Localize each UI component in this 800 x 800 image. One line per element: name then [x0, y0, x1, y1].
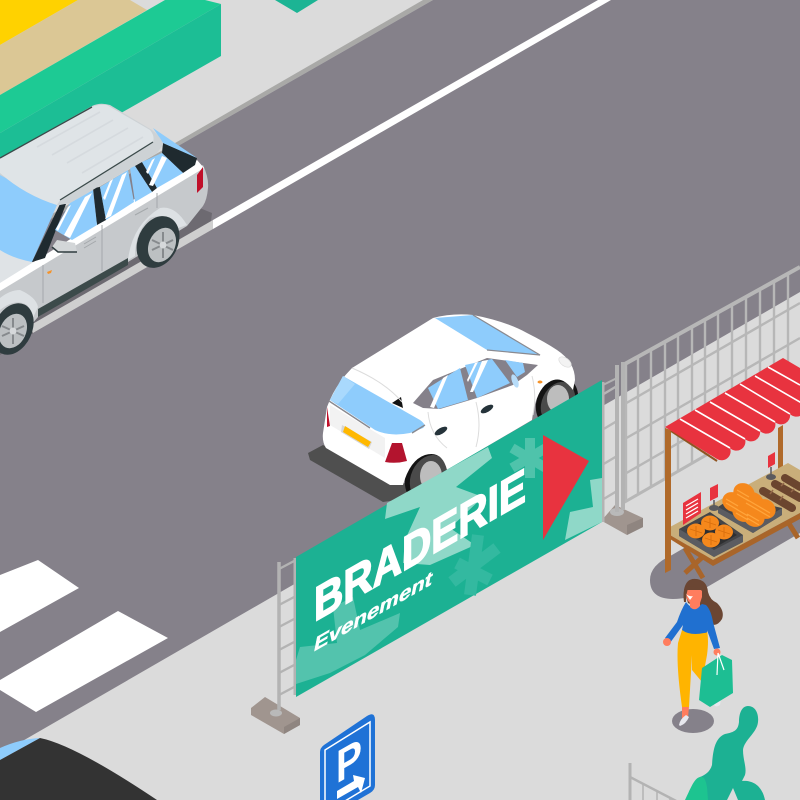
silver SUV [0, 104, 213, 362]
front wheel [528, 370, 586, 434]
rear post [778, 425, 783, 472]
rear wheel [396, 442, 460, 512]
market stall [650, 358, 800, 599]
roof panel [0, 105, 154, 205]
red awning [665, 358, 800, 460]
tail lights [327, 407, 407, 463]
pillars and rear dark glass [32, 143, 197, 262]
table [670, 463, 800, 566]
rear panel shade [330, 405, 385, 458]
tail light [197, 167, 203, 193]
front foot [679, 707, 689, 726]
door mirror [52, 240, 77, 252]
licence plate [341, 425, 372, 449]
side windows [428, 359, 525, 409]
door handles [433, 403, 495, 437]
roof ribs [37, 112, 143, 173]
window reflections [56, 156, 167, 238]
rocker panel [38, 258, 128, 317]
windshield [435, 315, 540, 355]
price tag left [709, 484, 719, 511]
banner subheading: Evenement [312, 565, 435, 657]
bonnet [0, 245, 45, 288]
right fence panel [602, 267, 800, 503]
back foot [714, 698, 721, 706]
hair front [683, 579, 707, 602]
legs [678, 630, 708, 707]
side window outline [413, 358, 538, 409]
right crate [718, 479, 782, 533]
long loaves [719, 479, 779, 531]
windshield [0, 173, 57, 262]
P letter: P [336, 727, 362, 794]
left fence [251, 558, 300, 734]
smile [686, 594, 693, 600]
parking sign [320, 714, 375, 800]
sausages [763, 478, 800, 508]
rear quarter dark glass [392, 397, 403, 408]
front post [665, 428, 671, 573]
banner shards [296, 447, 602, 684]
arrow [337, 775, 365, 799]
hair back [684, 579, 723, 625]
side windows [55, 128, 197, 240]
awning beam [671, 431, 717, 461]
dark car bottom left [0, 738, 157, 800]
red triangle logo [543, 435, 589, 540]
headlight [557, 355, 573, 369]
front arch [0, 290, 38, 320]
rear arch [128, 208, 187, 260]
blue top [665, 602, 720, 649]
rear window [329, 376, 425, 434]
side indicator [538, 380, 542, 384]
price tag right [766, 452, 776, 480]
teal block top [275, 0, 318, 13]
white hatchback [308, 314, 586, 512]
shopping bag [699, 653, 733, 707]
crosswalk stripes [0, 560, 168, 712]
left hand [663, 638, 671, 646]
mirror [510, 373, 520, 389]
left crate [679, 512, 743, 557]
planter block top left [0, 0, 221, 182]
neck and face [685, 590, 702, 609]
body highlight strip [0, 160, 204, 291]
right hand [714, 648, 720, 656]
menu sign [683, 492, 701, 525]
roof rails [0, 107, 153, 200]
banner heading: BRADERIE [314, 457, 526, 632]
rear wheel [128, 209, 188, 275]
side marker [47, 270, 52, 274]
door seams [352, 368, 535, 448]
car body [0, 165, 208, 348]
window reflections [430, 360, 488, 408]
banner background [296, 380, 602, 697]
road centre line [213, 0, 611, 229]
banner [296, 380, 602, 697]
shadow [672, 709, 714, 733]
car shadow [308, 445, 430, 502]
round loaves [687, 516, 733, 548]
roof frame [0, 104, 163, 205]
car shadow [0, 200, 213, 355]
banner asterisks [452, 438, 546, 595]
woman with shopping bag [663, 579, 733, 733]
bottom fence [630, 763, 680, 800]
bush [685, 706, 765, 800]
right fence posts [602, 362, 643, 535]
car body [323, 314, 575, 485]
stall shadow [650, 480, 800, 599]
table legs [685, 522, 798, 578]
front wheel [0, 296, 42, 362]
door seams and handles [43, 193, 157, 303]
